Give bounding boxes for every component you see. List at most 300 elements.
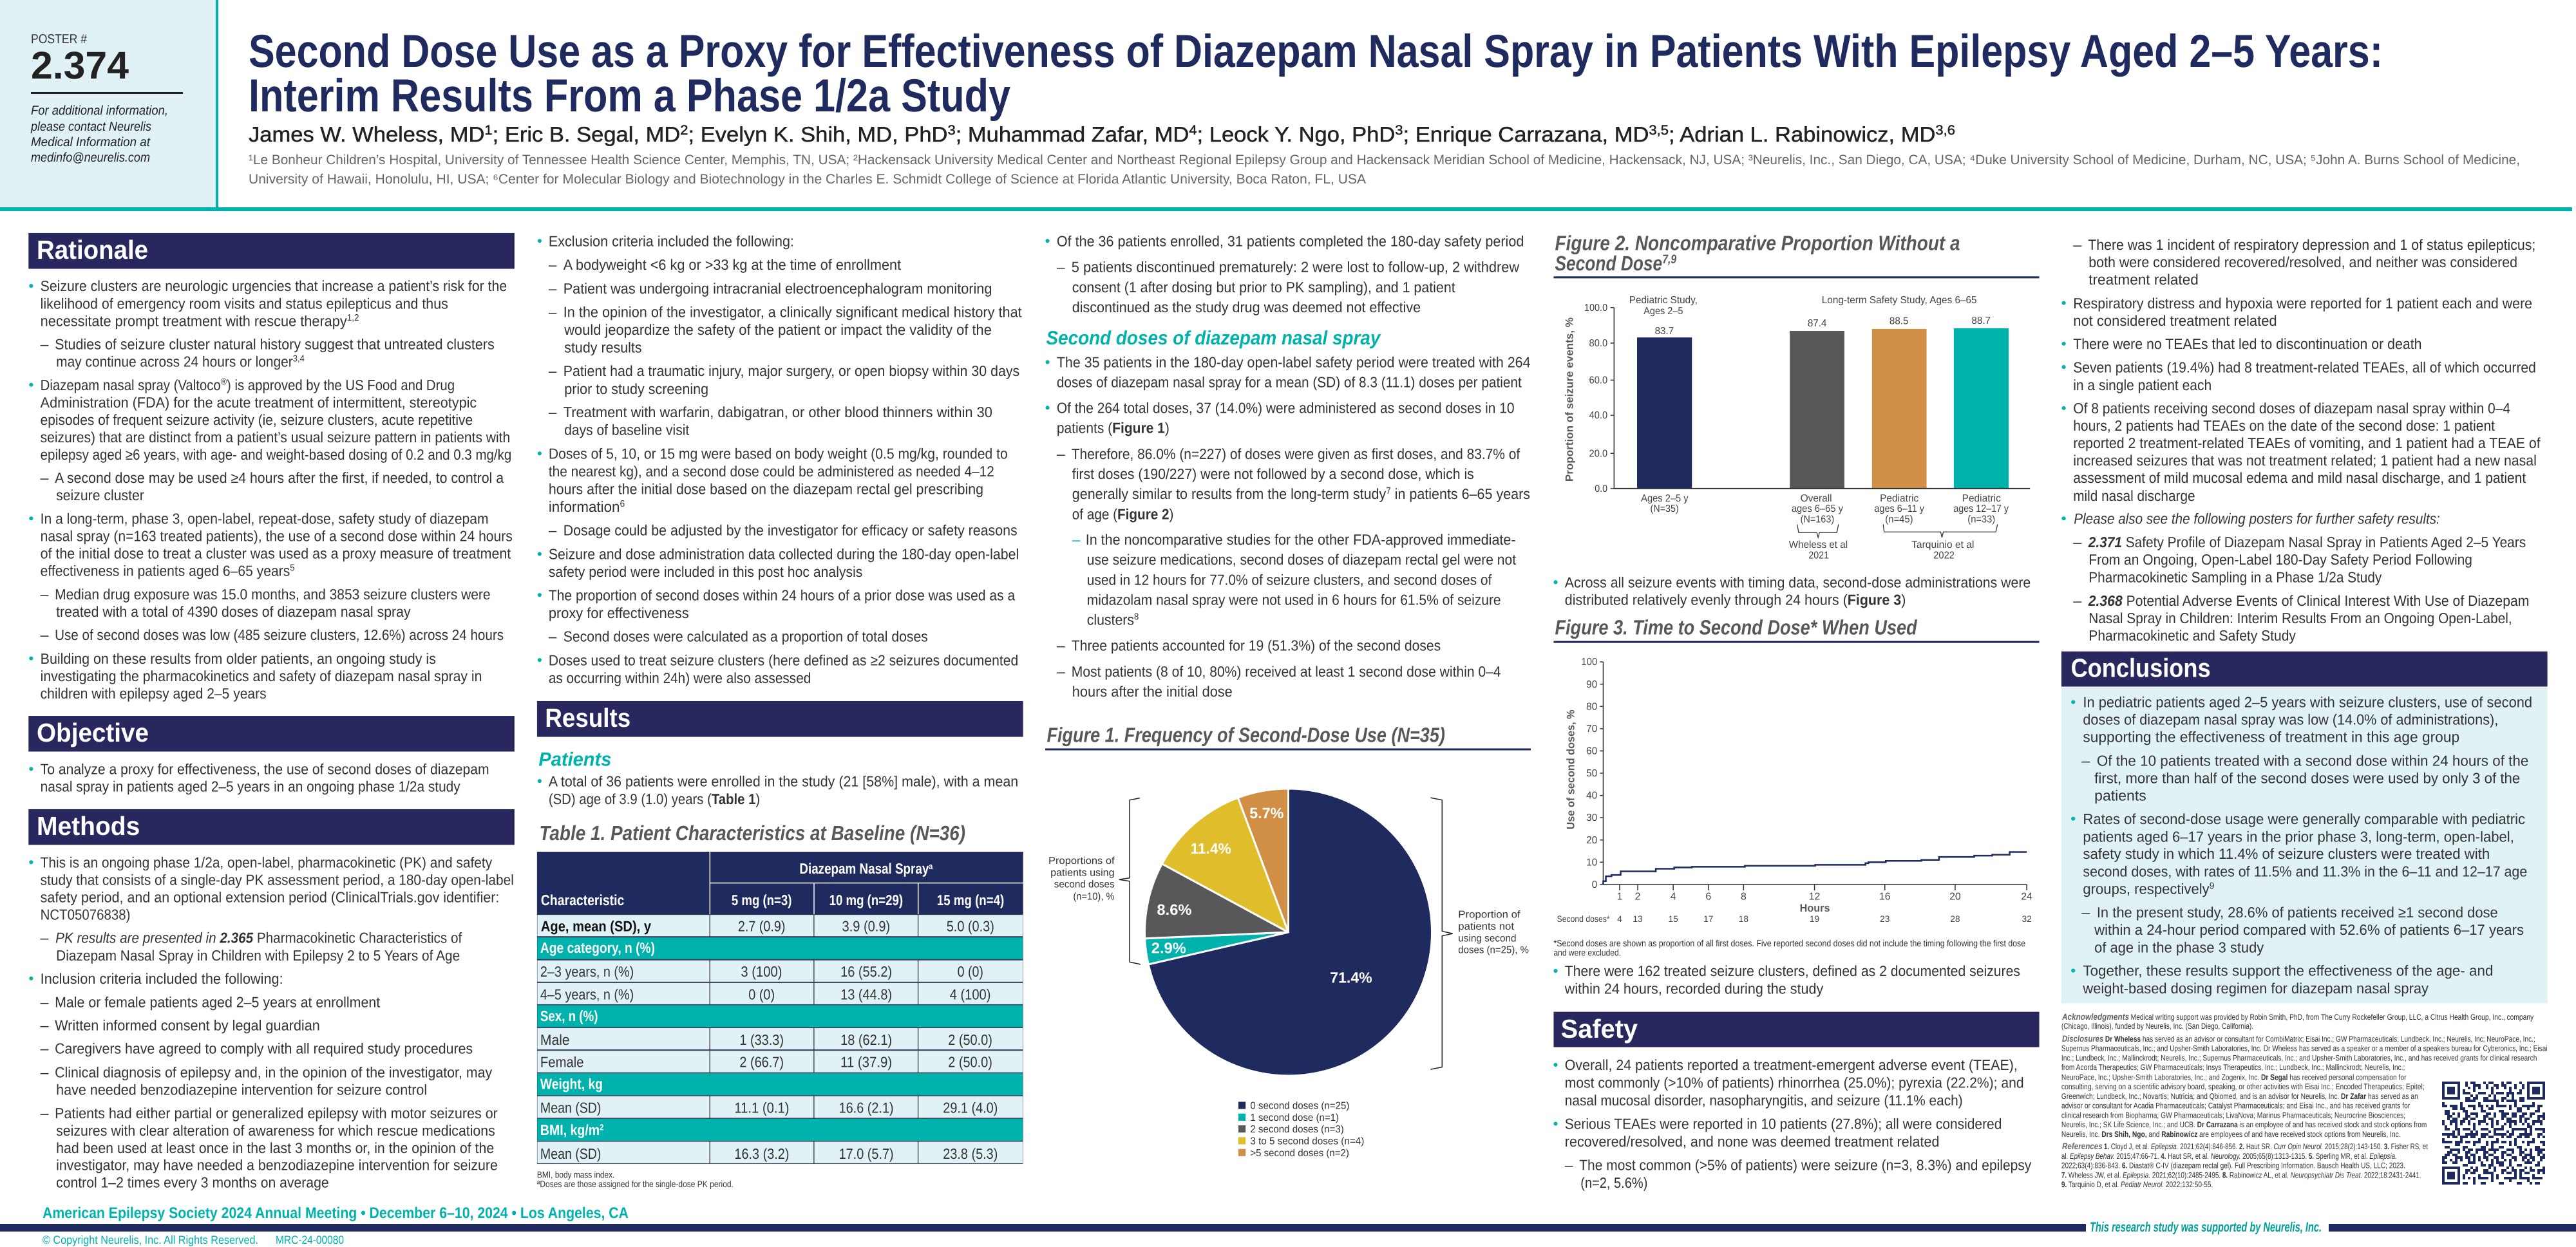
disclosures: NeuroPace, Inc.; Upsher-Smith Laboratories, Inc.; and Zogenix, Inc. Dr Segal has received personal compensation for [2061,1073,2406,1082]
conclusion 1: doses of diazepam nasal spray was low (14.0% of administrations), [2083,711,2498,728]
conclusions 2 and 3: – [2081,752,2090,769]
table header: 5 mg (n=3) [732,892,791,908]
enrollment text [1045,232,1524,315]
exclusion criteria and dosing text: Exclusion criteria included the following: [549,232,794,249]
methods text: seizures with clear alteration of awareness for which rescue medications [56,1122,495,1139]
enrollment text: 5 patients discontinued prematurely: 2 were lost to follow-up, 2 withdrew [1072,259,1519,276]
methods text: investigator, may have needed a benzodiazepine intervention for seizure [56,1157,498,1174]
bracket: patients not using second doses: patients not [1458,921,1514,932]
bar values: 83.7 [1655,325,1674,337]
rationale text [29,277,513,702]
second doses text: patients (Figure 1) [1057,420,1170,436]
exclusion criteria and dosing text: the nearest kg), and a second dose could be administered as needed 4–12 [549,463,994,480]
poster number panel: Medical Information at [31,135,151,149]
enrollment text: – [1057,259,1065,276]
pie legend: 3 to 5 second doses (n=4) [1250,1135,1364,1147]
y tick labels: 80 [1586,700,1597,712]
methods text: Written informed consent by legal guardian [55,1017,320,1034]
footer bar [0,1224,2576,1232]
figure 1 title: Figure 1. Frequency of Second-Dose Use (N=35) [1047,724,1445,747]
enrollment text: consent (1 after dosing but prior to PK sampling), and 1 patient [1072,279,1455,295]
second doses text [1045,354,1531,700]
panel: figure 3 and safety [1553,656,2040,1191]
figure 1: pie chart panel [1045,724,1531,1158]
x tick labels: 20 [1949,890,1961,902]
pie value labels [1151,805,1372,986]
category labels: (n=33) [1967,513,1995,525]
table rows: 0 (0) [958,963,983,980]
bars [1637,328,2009,489]
y tick labels: 20 [1586,834,1597,845]
second doses text: 7 [1386,485,1391,496]
disclosures: advisor or consultant for Acadia Pharmaceuticals; Catalyst Pharmaceuticals; and Eisai Inc., and has received grants for [2061,1102,2410,1111]
figure 2 takeaway: Across all seizure events with timing data, second-dose administrations were [1565,574,2031,591]
heading: methods [28,809,515,845]
table rows: Age category, n (%) [540,939,655,956]
category labels: Pediatric [1962,492,2001,503]
acknowledgments: (Chicago, Illinois), funded by Neurelis, Inc. (San Diego, California). [2061,1022,2253,1031]
authors: 3 [947,123,956,138]
disclosures: Neurelis, Inc.; SK Life Science, Inc.; and UCB. Dr Carrazana is an employee of and has received stock and stock options from [2061,1120,2427,1129]
table rows: 2 [600,1122,603,1132]
rationale text: of the initial dose to treat a cluster was used as a proxy measure of treatment [41,545,511,562]
conclusions 2 and 3: safety study in which 11.4% of seizure clusters were treated with [2083,845,2490,862]
safety continued text: There was 1 incident of respiratory depression and 1 of status epilepticus; [2088,236,2535,253]
bracket: patients using second doses: second doses [1054,878,1115,890]
patients text: (SD) age of 3.9 (1.0) years (Table 1) [549,791,760,807]
safety continued text: Respiratory distress and hypoxia were reported for 1 patient each and were [2073,295,2532,312]
methods text: Male or female patients aged 2–5 years at enrollment [55,994,380,1011]
methods text: – [41,1105,48,1121]
authors: 3,6 [1935,123,1955,138]
references: al. Epilepsy Behav. 2015;47:66-71. 4. Haut SR, et al. Neurology. 2005;65(8):1313-1315. 5. Sperling MR, et al. Epilepsia. [2061,1152,2397,1161]
line chart: time to second dose [1557,656,2032,924]
pie annotations [1048,798,1529,1158]
x tick labels: 24 [2021,890,2032,902]
methods text: – [41,930,48,946]
figure 2 title: 7,9 [1662,252,1676,266]
rationale text: seizure cluster [56,487,144,503]
treated clusters text: There were 162 treated seizure clusters, defined as 2 documented seizures [1565,962,2020,979]
methods text: had been used at least once in the last 3 months or, in the opinion of the [56,1139,494,1156]
table rows: Female [540,1054,584,1071]
citation braces: Wheless et al [1789,539,1848,550]
exclusion criteria and dosing text: prior to study screening [564,380,708,397]
pie legend: 2 second doses (n=3) [1250,1123,1344,1135]
conclusions 2 and 3: 9 [2210,881,2214,891]
heading: rationale: Rationale [37,236,148,265]
second doses counts row: 15 [1668,914,1678,924]
panel: patients and table [537,748,1023,1189]
safety continued text: Pharmacokinetic Sampling in a Phase 1/2a Study [2088,568,2382,585]
bracket: patients using second doses: (n=10), % [1073,890,1115,902]
second doses counts row: 17 [1703,914,1713,924]
title: Interim Results From a Phase 1/2a Study [249,70,1010,122]
table rows: 29.1 (4.0) [943,1100,998,1116]
header band [0,0,2572,211]
second doses text: – [1057,663,1065,680]
exclusion criteria and dosing text: proxy for effectiveness [549,605,689,621]
safety continued text: Pharmacokinetic and Safety Study [2088,627,2296,644]
second doses text: generally similar to results from the long-term study [1072,485,1407,502]
second doses text: – [1057,637,1065,654]
figure 3 title: Figure 3. Time to Second Dose* When Used [1555,616,1917,639]
exclusion criteria and dosing text: The proportion of second doses within 24 hours of a prior dose was used as a [549,586,1016,603]
safety continued text: Please also see the following posters for further safety results: [2074,511,2440,527]
methods text [29,854,514,1191]
panel: results continued [1045,232,1531,700]
figure 2 takeaway: distributed relatively evenly through 24 hours (Figure 3) [1565,592,1906,608]
panel: objective and methods [28,716,515,1191]
heading: conclusions: Conclusions [2071,653,2211,682]
rationale text: Building on these results from older patients, an ongoing study is [41,650,436,667]
methods text: Clinical diagnosis of epilepsy and, in the opinion of the investigator, may [55,1064,492,1080]
table rows: 5.0 (0.3) [947,918,994,935]
exclusion criteria and dosing text [538,232,1022,686]
table rows: 2.7 (0.9) [738,918,785,935]
subheading: second doses: Second doses of diazepam nasal spray [1046,327,1381,349]
methods text: control 1–2 times every 3 months on average [56,1174,329,1191]
safety text: most commonly (>10% of patients) rhinorrhea (25.0%); pyrexia (22.2%); and [1565,1074,2024,1091]
rationale text: Studies of seizure cluster natural history suggest that untreated clusters [55,336,495,353]
methods text: Diazepam Nasal Spray in Children with Epilepsy 2 to 5 Years of Age [56,947,460,964]
methods text: Patients had either partial or generalized epilepsy with motor seizures or [55,1105,498,1121]
methods text: – [41,994,48,1011]
exclusion criteria and dosing text: – [549,404,556,420]
safety text: (n=2, 5.6%) [1580,1174,1647,1191]
x tick labels: 8 [1741,890,1747,902]
authors: ; Enrique Carrazana, MD [1403,122,1649,146]
safety continued text: Nasal Spray in Children: Interim Results From an Ongoing Open-Label, [2088,610,2512,626]
pie chart [1144,789,1432,1076]
second doses text: Therefore, 86.0% (n=227) of doses were given as first doses, and 83.7% of [1072,445,1520,462]
rationale text: 3,4 [293,353,305,363]
conclusions 2 and 3: In the present study, 28.6% of patients received ≥1 second dose [2097,904,2498,921]
rationale text: In a long-term, phase 3, open-label, repeat-dose, safety study of diazepam [41,511,489,527]
conclusions 2 and 3: Together, these results support the effectiveness of the age- and [2083,962,2493,979]
methods text: – [41,1064,48,1080]
rationale text: effectiveness in patients aged 6–65 years [41,563,312,579]
second doses counts row: 4 [1617,914,1622,924]
methods text: PK results are presented in 2.365 Pharmacokinetic Characteristics of [55,930,462,946]
safety continued text: treatment related [2088,271,2199,288]
second doses counts row: 19 [1810,914,1819,924]
exclusion criteria and dosing text: – [549,628,556,645]
references: 7. Wheless JW, et al. Epilepsia. 2021;62(10):2485-2495. 8. Rabinowicz AL, et al. Neuropsychiatr Dis Treat. 2022;18:2431-2441. [2061,1171,2421,1179]
rationale text: seizures) that are distinct from a patient’s usual seizure pattern in patients with [41,429,510,445]
meeting line: American Epilepsy Society 2024 Annual Meeting • December 6–10, 2024 • Los Angeles, CA [43,1205,629,1222]
y axis: Proportion of seizure events, % [1563,317,1575,482]
bracket: patients not using second doses [1430,798,1529,1069]
table rows: 11 (37.9) [840,1054,892,1071]
safety continued text: 2.368 Potential Adverse Events of Clinical Interest With Use of Diazepam [2088,592,2529,609]
rationale text: A second dose may be used ≥4 hours after the first, if needed, to control a [55,469,504,486]
methods text: – [41,1040,48,1057]
second doses counts row: 32 [2022,914,2032,924]
figure 3 footnote: *Second doses are shown as proportion of all first doses. Five reported second doses did not include the timing following the first dose [1553,938,2025,948]
table rows: 16.3 (3.2) [734,1145,789,1162]
safety continued text: There were no TEAEs that led to discontinuation or death [2073,335,2422,352]
safety continued text: both were considered recovered/resolved, and neither was considered [2088,254,2517,270]
safety continued text: Seven patients (19.4%) had 8 treatment-related TEAEs, all of which occurred [2073,359,2536,375]
rationale text: may continue across 24 hours or longer [56,353,316,370]
table rows: Age, mean (SD), y [541,918,651,935]
conclusions 2 and 3: patients [2094,787,2146,804]
exclusion criteria and dosing text: Treatment with warfarin, dabigatran, or other blood thinners within 30 [564,404,992,420]
acknowledgments: Acknowledgments [2062,1012,2129,1022]
y tick labels: 60 [1586,745,1597,756]
table footnotes [537,1170,734,1189]
table rows: 23.8 (5.3) [943,1145,998,1162]
table rows: 2–3 years, n (%) [540,963,634,980]
exclusion criteria and dosing text: as occurring within 24h) were also assessed [549,670,811,686]
conclusion 1: supporting the effectiveness of treatment in this age group [2083,729,2459,745]
rationale text: children with epilepsy aged 2–5 years [41,685,267,702]
exclusion criteria and dosing text: study results [564,339,642,356]
table rows: 4–5 years, n (%) [540,986,634,1002]
safety text: Overall, 24 patients reported a treatment-emergent adverse event (TEAE), [1565,1056,2018,1073]
methods text: Inclusion criteria included the following: [41,970,283,987]
exclusion criteria and dosing text: Patient had a traumatic injury, major surgery, or open biopsy within 30 days [564,362,1019,379]
category labels: Ages 2–5 y [1641,492,1689,503]
table rows: 0 (0) [748,986,775,1002]
study group labels [1629,294,1977,317]
y axis [1563,302,1614,494]
authors: 3,5 [1649,123,1669,138]
conclusions 2 and 3: first, more than half of the second doses were used by only 3 of the [2094,769,2520,786]
second doses text: – [1057,445,1065,462]
exclusion criteria and dosing text: Patient was undergoing intracranial electroencephalogram monitoring [564,280,992,297]
conclusions 2 and 3: – [2081,904,2090,921]
table rows: 18 (62.1) [840,1031,892,1048]
bar values: 88.5 [1889,315,1908,326]
second doses text: In the noncomparative studies for the other FDA-approved immediate- [1086,531,1516,548]
references: References [2062,1141,2103,1151]
heading: methods: Methods [37,811,140,841]
table rows: 16 (55.2) [840,963,892,980]
x tick labels: 6 [1705,890,1711,902]
bracket: patients using second doses: Proportions of [1048,855,1115,866]
conclusion 1 [2071,694,2532,745]
second doses text: doses of diazepam nasal spray for a mean (SD) of 8.3 (11.1) doses per patient [1057,374,1522,391]
rationale text: Use of second doses was low (485 seizure clusters, 12.6%) across 24 hours [55,626,504,643]
heading: conclusions [2061,652,2548,687]
second doses text: – [1072,531,1081,548]
pie value labels: 71.4% [1330,969,1372,986]
rationale text: ) is approved by the US Food and Drug [227,377,455,393]
second doses text: clusters [1087,612,1138,628]
table title: Table 1. Patient Characteristics at Baseline (N=36) [539,822,965,845]
safety continued text: increased seizures that was not treatment related; 1 patient had a new nasal [2073,452,2537,469]
references [2061,1141,2428,1189]
poster number panel: POSTER # [31,32,88,46]
heading: objective: Objective [37,718,149,747]
citation braces: 2021 [1808,549,1829,561]
authors: ; Evelyn K. Shih, MD, PhD [688,122,947,146]
y axis: 40.0 [1589,409,1607,421]
exclusion criteria and dosing text: 6 [620,498,625,509]
figure 2 title [1553,232,2040,278]
safety text: nasal mucosal disorder, nasopharyngitis, and seizure (11.1% each) [1565,1092,1963,1109]
y tick labels: 0 [1592,879,1597,890]
y tick labels: 40 [1586,789,1597,801]
rationale text: Seizure clusters are neurologic urgencies that increase a patient’s risk for the [41,277,507,294]
figure 2 title: Figure 2. Noncomparative Proportion Without a [1555,232,1960,255]
y axis: 20.0 [1589,447,1607,459]
bracket: patients not using second doses: using second [1458,932,1517,944]
second doses counts row: 23 [1880,914,1889,924]
pie legend: >5 second doses (n=2) [1250,1147,1349,1158]
table rows: 3.9 (0.9) [842,918,890,935]
figure 2 takeaway [1553,574,2031,608]
table rows: 2 (50.0) [948,1054,992,1071]
y axis: 80.0 [1589,337,1607,349]
category labels: Overall [1801,492,1832,503]
y tick labels: 90 [1586,679,1597,689]
second doses counts row: 13 [1633,914,1643,924]
exclusion criteria and dosing text: Second doses were calculated as a proportion of total doses [564,628,928,645]
y tick labels: Use of second doses, % [1564,709,1577,829]
y tick labels: 50 [1586,767,1597,779]
y tick labels [1564,656,1597,890]
exclusion criteria and dosing text: – [549,521,556,538]
funding statement: This research study was supported by Neurelis, Inc. [2090,1220,2322,1235]
heading: results: Results [545,703,630,732]
axes [1600,662,2027,890]
safety text: Serious TEAEs were reported in 10 patients (27.8%); all were considered [1565,1116,2002,1132]
figure 3 footnote [1553,938,2025,958]
y tick labels: 10 [1586,856,1597,868]
safety continued text: reported 2 treatment-related TEAEs of vomiting, and 1 patient had a TEAE of [2073,435,2541,451]
methods text: – [41,1017,48,1034]
second doses text: first doses (190/227) were not followed by a second dose, which is [1072,465,1474,482]
step line [1603,852,2027,885]
bracket: patients not using second doses: doses (n=25), % [1458,944,1529,955]
references: 9. Tarquinio D, et al. Pediatr Neurol. 2022;132:50-55. [2061,1180,2213,1189]
bracket: patients using second doses: patients using [1050,867,1115,878]
second doses counts row: 18 [1739,914,1748,924]
heading: rationale [28,233,515,269]
exclusion criteria and dosing text: In the opinion of the investigator, a clinically significant medical history that [564,304,1022,321]
safety continued text: hours, 2 patients had TEAEs on the date of the second dose: 1 patient [2073,417,2495,434]
second doses text: midazolam nasal spray were not used in 6 hours for 61.5% of seizure [1087,592,1501,608]
rationale text: Diazepam nasal spray (Valtoco [41,377,244,393]
methods text: This is an ongoing phase 1/2a, open-label, pharmacokinetic (PK) and safety [41,854,492,871]
table rows: Mean (SD) [540,1145,601,1162]
authors: James W. Wheless, MD [249,122,474,146]
x tick labels: 2 [1635,890,1640,902]
panel: conclusions text [2071,694,2532,997]
x tick labels: 1 [1617,890,1622,902]
pie value labels: 8.6% [1157,901,1192,918]
table footnotes: ªDoses are those assigned for the single-dose PK period. [537,1179,734,1189]
conclusions 2 and 3 [2071,752,2528,997]
pie legend: 0 second doses (n=25) [1250,1100,1349,1111]
second doses counts row: Second doses* [1557,914,1610,924]
exclusion criteria and dosing text: hours after the initial dose based on the diazepam rectal gel prescribing [549,481,983,498]
conclusions 2 and 3: of age in the phase 3 study [2094,939,2264,956]
bar values: 87.4 [1808,317,1826,328]
methods text: have needed benzodiazepine intervention for seizure control [56,1081,427,1098]
category labels: (N=35) [1650,503,1679,514]
rationale text: episodes of frequent seizure activity (ie, seizure clusters, acute repetitive [41,411,473,428]
treated clusters text [1553,962,2020,997]
table rows: 11.1 (0.1) [734,1100,789,1116]
rationale text: likelihood of emergency room visits and status epilepticus and thus [41,295,448,312]
second doses text: of age (Figure 2) [1072,505,1173,522]
table header [541,860,1004,908]
category labels: Pediatric [1880,492,1918,503]
second doses text: use seizure medications, second doses of diazepam rectal gel were not [1087,551,1516,568]
safety continued text: in a single patient each [2073,377,2211,393]
conclusions 2 and 3: Rates of second-dose usage were generally comparable with pediatric [2083,811,2525,827]
figure 2 title: Second Dose [1555,252,1686,275]
exclusion criteria and dosing text: Dosage could be adjusted by the investigator for efficacy or safety reasons [564,521,1018,538]
disclosures: Neurelis, Inc. Drs Shih, Ngo, and Rabinowicz are employees of and have received stock options from Neurelis, Inc. [2061,1130,2401,1139]
y tick labels: 70 [1586,723,1597,735]
patients text: A total of 36 patients were enrolled in the study (21 [58%] male), with a mean [549,773,1018,789]
bar chart: proportion without a second dose [1563,294,2030,561]
rationale text: – [41,586,48,603]
safety continued text: – [2073,534,2081,550]
study group labels: Ages 2–5 [1643,305,1683,317]
conclusions 2 and 3: second doses, with rates of 11.5% and 11.3% in the 6–11 and 12–17 age [2083,863,2527,880]
safety text: – [1565,1157,1573,1174]
safety continued text: not considered treatment related [2073,312,2277,329]
rationale text: 5 [290,563,295,572]
y axis: 0.0 [1595,483,1607,494]
table rows [540,918,998,1162]
safety continued text: 2.371 Safety Profile of Diazepam Nasal Spray in Patients Aged 2–5 Years [2088,534,2526,550]
treated clusters text: within 24 hours, recorded during the study [1564,980,1824,997]
y axis: 60.0 [1589,374,1607,386]
category labels: (N=163) [1801,513,1834,525]
table rows: Weight, kg [540,1076,603,1092]
table rows: 3 (100) [741,963,782,980]
conclusion 1: In pediatric patients aged 2–5 years with seizure clusters, use of second [2083,694,2532,711]
bar values: 88.7 [1971,314,1991,326]
authors: ; Muhammad Zafar, MD [956,122,1189,146]
rationale text: 1,2 [347,312,359,323]
heading: objective [28,716,515,751]
affiliations [249,153,2520,187]
affiliations: ¹Le Bonheur Children’s Hospital, University of Tennessee Health Science Center, Memphis, TN, USA; ²Hackensack University Medical Center and Northeast Regional Epilepsy Group and Hackensack Meridian School of Medicine, Hackensack, NJ, USA; ³Neurelis, Inc., San Diego, CA, USA; ⁴Duke University School of Medicine, Durham, NC, USA; ⁵John A. Burns School of Medicine, [249,153,2520,167]
second doses text: hours after the initial dose [1072,683,1233,700]
exclusion criteria and dosing text: would jeopardize the safety of the patient or impact the validity of the [564,321,992,338]
table rows: BMI, kg/m [540,1121,609,1138]
subheading: patients: Patients [538,748,611,770]
y tick labels: 30 [1586,812,1597,823]
poster number panel: medinfo@neurelis.com [31,151,150,165]
safety continued text: – [2073,236,2081,253]
safety continued text: Of 8 patients receiving second doses of diazepam nasal spray within 0–4 [2073,400,2510,417]
enrollment text: discontinued as the study drug was deemed not effective [1072,299,1421,315]
methods text: Caregivers have agreed to comply with all required study procedures [55,1040,473,1057]
heading: safety [1553,1012,2040,1047]
authors: 1 [484,123,493,138]
safety continued text: From an Ongoing, Open-Label 180-Day Safety Period Following [2088,551,2472,568]
rationale text: – [41,469,48,486]
category labels: ages 6–65 y [1792,503,1843,514]
authors: 2 [680,123,688,138]
table header: 10 mg (n=29) [829,892,903,908]
rationale text: Administration (FDA) for the acute treatment of intermittent, stereotypic [41,394,477,411]
methods text: NCT05076838) [41,906,130,923]
table rows: Sex, n (%) [540,1008,598,1024]
safety text: recovered/resolved, and none was deemed treatment related [1565,1133,1939,1150]
pie value labels: 5.7% [1249,805,1283,821]
methods text: study that consists of a single-day PK assessment period, a 180-day open-label [41,872,514,888]
